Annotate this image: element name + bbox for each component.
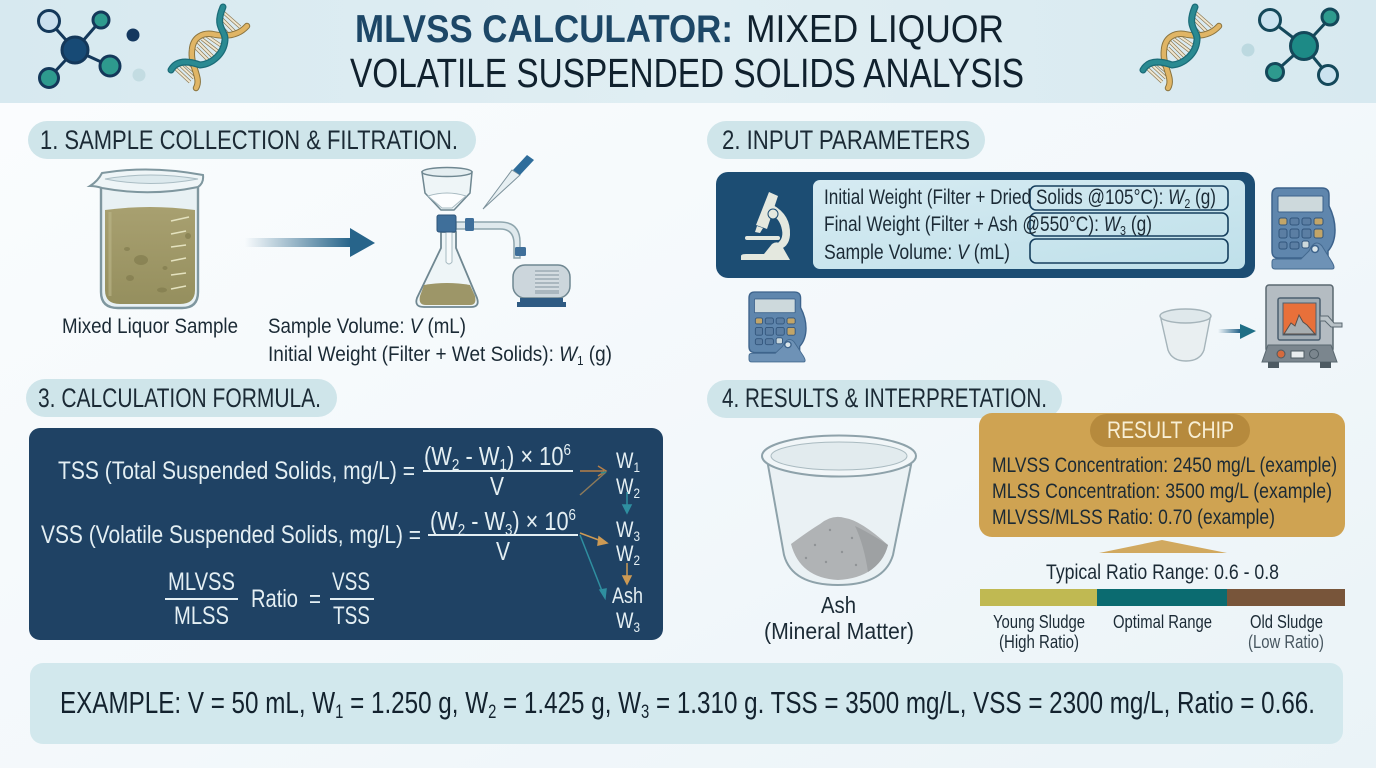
icon: dots left bbox=[126, 28, 146, 82]
input labels: Initial Weight (Filter + Dried Solids @105°C): W bbox=[824, 186, 1239, 209]
arrow bbox=[245, 228, 375, 257]
icon: calculator left bbox=[749, 292, 806, 362]
panel: input parameters bbox=[26, 121, 1345, 744]
panel: sample collection and filtration bbox=[28, 121, 612, 368]
label: mixed liquor sample: Mixed Liquor Sample bbox=[62, 314, 238, 338]
example text: 3 bbox=[641, 702, 649, 723]
input labels: 2 bbox=[1184, 196, 1190, 211]
example text: = 1.425 g, W bbox=[496, 685, 642, 720]
example text: 2 bbox=[488, 702, 496, 723]
heading: section 2 bbox=[707, 121, 985, 159]
icon: molecule left bbox=[38, 10, 120, 88]
formula: VSS: (W bbox=[430, 506, 463, 536]
icon: microscope bbox=[741, 192, 790, 260]
input labels bbox=[824, 186, 1216, 264]
formula: TSS: - W bbox=[459, 441, 500, 471]
text: sample volume and initial weight bbox=[268, 314, 612, 368]
input labels: (g) bbox=[1126, 213, 1152, 236]
icon: DNA right bbox=[1143, 7, 1219, 88]
ratio scale bar bbox=[980, 589, 1345, 606]
variables column: W bbox=[616, 608, 637, 633]
chip title bbox=[1090, 414, 1250, 447]
heading: section 3: 3. CALCULATION FORMULA. bbox=[38, 383, 321, 413]
input fields bbox=[1030, 186, 1228, 263]
title bbox=[350, 8, 1024, 96]
panel: calculation formula bbox=[26, 379, 663, 640]
heading: section 1: 1. SAMPLE COLLECTION & FILTRATION. bbox=[40, 125, 458, 155]
label: typical ratio range: Typical Ratio Range: 0.6 - 0.8 bbox=[1046, 561, 1279, 584]
formula: VSS: VSS (Volatile Suspended Solids, mg/L) = bbox=[41, 521, 421, 549]
heading: section 3 bbox=[26, 379, 337, 417]
example bar bbox=[30, 663, 1343, 744]
variables column: 2 bbox=[633, 552, 640, 568]
formula card bbox=[29, 428, 663, 640]
variables column: 2 bbox=[633, 485, 640, 501]
formula: VSS: ) × 10 bbox=[512, 506, 569, 536]
formula: VSS: 6 bbox=[569, 507, 576, 524]
label: ash bbox=[764, 592, 914, 644]
icon: ash crucible bbox=[762, 436, 916, 585]
icon: DNA left bbox=[171, 7, 247, 88]
variables column: 3 bbox=[633, 528, 640, 544]
formula: TSS: V bbox=[490, 471, 505, 501]
chip title: RESULT CHIP bbox=[1107, 417, 1234, 444]
label: ash: (Mineral Matter) bbox=[764, 618, 914, 644]
formula: ratio: VSS bbox=[332, 568, 370, 596]
title: VOLATILE SUSPENDED SOLIDS ANALYSIS bbox=[350, 50, 1024, 96]
variables column bbox=[612, 448, 643, 635]
formula: ratio: Ratio bbox=[251, 585, 298, 613]
formula: TSS: ) × 10 bbox=[507, 441, 564, 471]
result chip bbox=[979, 413, 1345, 537]
scale labels: Optimal Range bbox=[1113, 612, 1212, 632]
pointer triangle bbox=[1099, 540, 1227, 553]
icon: small crucible bbox=[1160, 309, 1211, 361]
formula: ratio: TSS bbox=[333, 602, 370, 630]
example text: EXAMPLE: V = 50 mL, W bbox=[60, 685, 412, 720]
heading: section 2: 2. INPUT PARAMETERS bbox=[722, 125, 970, 155]
heading: section 4: 4. RESULTS & INTERPRETATION. bbox=[722, 383, 1047, 413]
input labels: Final Weight (Filter + Ash @550°C): W bbox=[824, 213, 1157, 236]
scale labels: (High Ratio) bbox=[999, 632, 1079, 652]
scale labels bbox=[993, 612, 1324, 652]
variables column: 3 bbox=[633, 619, 640, 635]
variables column: W bbox=[616, 517, 637, 542]
scale labels: Old Sludge bbox=[1250, 612, 1323, 632]
icon: calculator right bbox=[1272, 188, 1335, 269]
formula: TSS: (W bbox=[424, 441, 457, 471]
variables column: W bbox=[616, 474, 637, 499]
scale labels: Young Sludge bbox=[993, 612, 1085, 632]
formula: ratio: = bbox=[309, 585, 321, 613]
icon: molecule right bbox=[1260, 9, 1338, 84]
panel: results and interpretation bbox=[707, 380, 1345, 652]
heading: section 4 bbox=[707, 380, 1062, 418]
formula: TSS bbox=[58, 441, 573, 501]
icon: muffle furnace bbox=[1262, 285, 1342, 368]
icon: pipette bbox=[483, 155, 534, 209]
formula: ratio bbox=[165, 568, 374, 630]
variables column: W bbox=[616, 541, 637, 566]
title: MLVSS CALCULATOR: bbox=[355, 8, 733, 51]
formula: VSS bbox=[41, 506, 578, 566]
text: sample volume and initial weight: (g) bbox=[584, 342, 612, 366]
example text: = 1.250 g, W bbox=[343, 685, 489, 720]
variables column: Ash bbox=[612, 583, 643, 608]
formula: TSS: TSS (Total Suspended Solids, mg/L) = bbox=[58, 457, 415, 485]
icon: beaker of mixed liquor bbox=[90, 169, 203, 308]
variables column: W bbox=[616, 448, 637, 473]
chip values: MLVSS/MLSS Ratio: 0.70 (example) bbox=[992, 505, 1275, 529]
formula: ratio: MLSS bbox=[174, 602, 229, 630]
formula: VSS: 3 bbox=[505, 522, 512, 539]
input card bbox=[716, 172, 1255, 278]
icon: filter flask and pump bbox=[416, 168, 570, 307]
heading: section 1 bbox=[28, 121, 476, 159]
text: sample volume and initial weight: Sample Volume: V (mL) bbox=[268, 314, 466, 338]
scale labels: (Low Ratio) bbox=[1248, 632, 1324, 652]
formula: VSS: V bbox=[496, 536, 511, 566]
input labels: (g) bbox=[1190, 186, 1216, 209]
arrow: crucible to furnace bbox=[1218, 324, 1256, 339]
formula: TSS: 6 bbox=[564, 442, 571, 459]
formula: VSS: 2 bbox=[458, 522, 465, 539]
title: MIXED LIQUOR bbox=[746, 8, 1004, 51]
formula: TSS: 2 bbox=[452, 457, 459, 474]
text: sample volume and initial weight: Initial Weight (Filter + Wet Solids): W bbox=[268, 342, 592, 366]
label: ash: Ash bbox=[821, 592, 856, 618]
formula: TSS: 1 bbox=[499, 457, 507, 474]
variables column: 1 bbox=[633, 459, 640, 475]
formula arrows bbox=[580, 466, 631, 598]
text: sample volume and initial weight: 1 bbox=[577, 353, 584, 368]
formula: ratio: MLVSS bbox=[168, 568, 235, 596]
formula: VSS: - W bbox=[465, 506, 505, 536]
chip values bbox=[992, 453, 1337, 529]
example text: 1 bbox=[335, 702, 343, 723]
icon: dot right bbox=[1242, 44, 1254, 56]
header band bbox=[0, 0, 1376, 103]
input labels: Sample Volume: V (mL) bbox=[824, 241, 1010, 264]
input labels: 3 bbox=[1120, 223, 1126, 238]
